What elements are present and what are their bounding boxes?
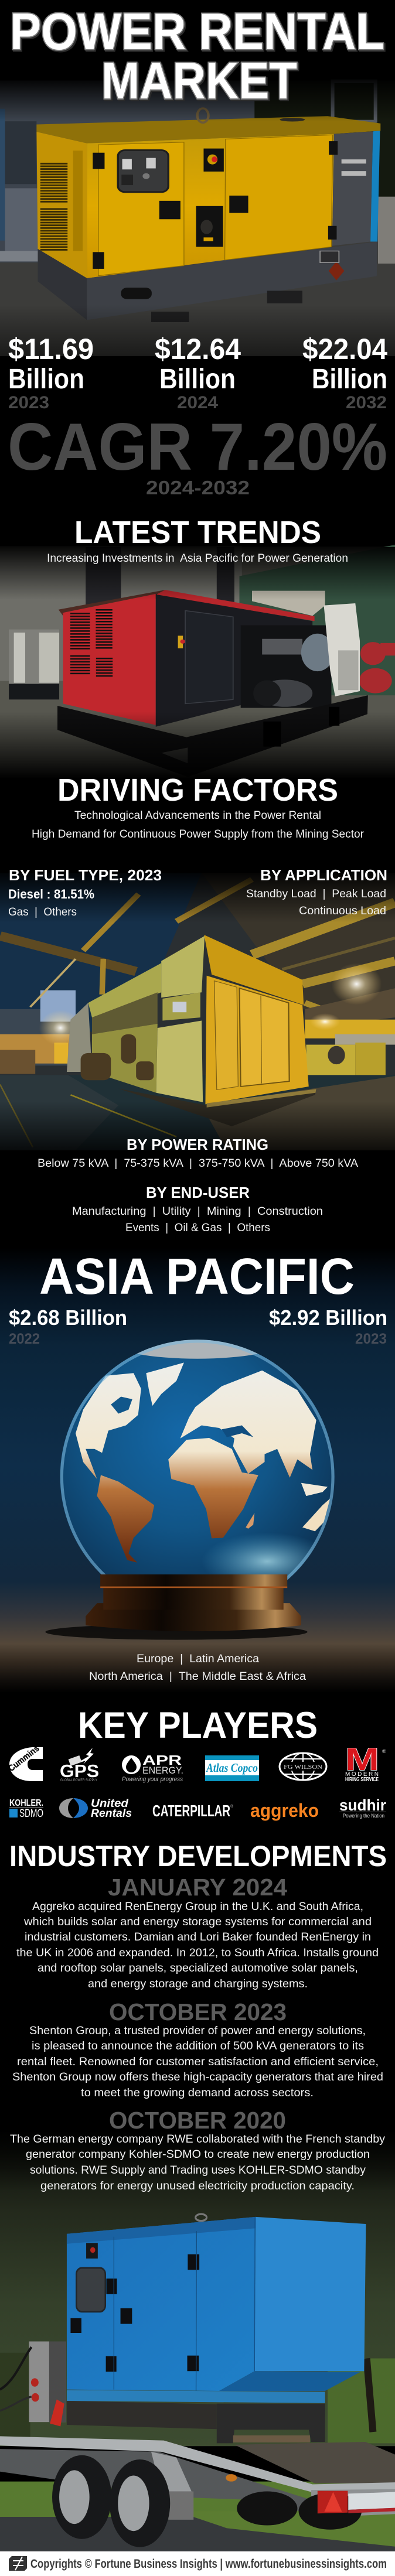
segment: by end-user: Manufacturing | Utility | Mining | Construction [72, 1205, 323, 1218]
panel: regional background [0, 1248, 395, 1693]
logo: United Rentals: United [91, 1798, 128, 1810]
market size stat: 2023: Billion [8, 364, 84, 395]
control panel [118, 150, 168, 192]
logo: FG Wilson [280, 1753, 326, 1780]
segment: by fuel type: BY FUEL TYPE, 2023 [9, 866, 162, 884]
text: October 2020 development: generators for energy unused electricity production capacity. [40, 2179, 355, 2192]
heading: latest trends: LATEST TRENDS [74, 515, 321, 550]
text: October 2023 development: Shenton Group now offers these high-capacity generators that are hired [12, 2071, 383, 2083]
segment: by power rating [38, 1136, 358, 1170]
text: January 2024 development: the UK in 2006 and expanded. In 2012, to South Africa. Installs ground [16, 1946, 379, 1959]
stat: asia pacific 2023 [269, 1306, 387, 1347]
generator body [36, 108, 380, 322]
logo: United Rentals [59, 1798, 132, 1820]
title [10, 2, 386, 111]
market size stat: 2024: Billion [159, 364, 236, 395]
text: October 2020 development: The German energy company RWE collaborated with the French standby [10, 2133, 385, 2145]
text: October 2023 development: Shenton Group, a trusted provider of power and energy solutions, [29, 2024, 366, 2037]
text: driving factors list: Technological Advancements in the Power Rental [74, 809, 321, 822]
text: January 2024 development: which builds solar and energy storage systems for commercial and [23, 1915, 372, 1928]
logo: GPS: GLOBAL POWER SUPPLY [60, 1779, 97, 1782]
stat: asia pacific 2023: $2.92 Billion [269, 1306, 387, 1330]
logo: Caterpillar: CATERPILLAR [152, 1802, 230, 1820]
text: January 2024 development: and energy storage and charging systems. [88, 1977, 308, 1990]
logo: GPS [60, 1748, 99, 1782]
market size stat: 2024 [155, 333, 241, 412]
text: October 2023 development: rental fleet. Renowned for customer satisfaction and efficient service, [17, 2055, 379, 2068]
logo: Caterpillar: ® [230, 1804, 234, 1809]
heading: key players: KEY PLAYERS [78, 1705, 318, 1746]
segment: by application: Standby Load | Peak Load [246, 887, 386, 900]
panel: hero generator photo [0, 81, 395, 356]
text: other regions: North America | The Middle East & Africa [89, 1670, 306, 1683]
logo: Modern Hiring Service: ® [382, 1748, 386, 1754]
segment: by application: Continuous Load [299, 904, 386, 917]
logo: Modern Hiring Service [345, 1742, 386, 1783]
text: October 2020 development: generator company Kohler-SDMO to create new energy production [26, 2148, 370, 2161]
stat: asia pacific 2022: $2.68 Billion [9, 1306, 127, 1330]
panel: footer [0, 2551, 395, 2576]
logo: GPS: GPS [60, 1761, 99, 1781]
segment: by power rating: Below 75 kVA | 75-375 kVA | 375-750 kVA | Above 750 kVA [38, 1157, 358, 1170]
icon: Fortune Business Insights logo [9, 2556, 27, 2571]
logo: Atlas Copco [205, 1755, 259, 1781]
text: October 2023 development [12, 2024, 383, 2099]
market size stat: 2023 [8, 333, 94, 412]
text: October 2023 development: to meet the growing demand across sectors. [81, 2086, 314, 2099]
segment: by application: BY APPLICATION [260, 866, 387, 884]
market size stat: 2023: 2023 [8, 393, 49, 412]
text: October 2020 development: solutions. RWE Supply and Trading uses KOHLER-SDMO standby [30, 2164, 366, 2177]
logo: United Rentals: Rentals [91, 1808, 132, 1820]
logo: Kohler SDMO: KOHLER. [9, 1798, 43, 1808]
logo: Cummins: Cummins [6, 1744, 41, 1774]
text: January 2024 development [16, 1900, 379, 1990]
blue generator [67, 2214, 366, 2443]
logo: Sudhir: Powering the Nation [343, 1813, 384, 1819]
trailer image top fade [0, 2132, 395, 2191]
segment: by end-user: BY END-USER [146, 1184, 250, 1201]
panel: latest trends generator photo [0, 545, 395, 779]
heading: asia pacific: ASIA PACIFIC [39, 1248, 355, 1305]
segment: by power rating: BY POWER RATING [127, 1136, 268, 1153]
CAGR: 2024-2032 [146, 477, 250, 498]
logo: Sudhir: sudhir [339, 1796, 386, 1814]
title: MARKET [103, 53, 298, 111]
logo: Atlas Copco: Atlas Copco [205, 1761, 258, 1775]
segment: by fuel type: Diesel : 81.51% [8, 887, 94, 901]
hero image fade [0, 80, 395, 121]
text: driving factors list [32, 809, 364, 841]
market size stat: 2023: $11.69 [8, 333, 94, 365]
logo: FG Wilson: FG WILSON [284, 1764, 322, 1771]
date: January 2024: JANUARY 2024 [108, 1874, 287, 1901]
trailer [0, 2436, 395, 2547]
logo: APR Energy [122, 1752, 183, 1783]
globe [60, 1340, 335, 1580]
segment: by fuel type [8, 866, 162, 918]
logo: APR Energy: ENERGY. [142, 1765, 183, 1776]
logo: APR Energy: APR [142, 1752, 182, 1768]
text: January 2024 development: industrial customers. Damian and Lori Baker founded RenEnergy in [25, 1931, 371, 1943]
text: latest trend item: Increasing Investments in Asia Pacific for Power Generation [47, 552, 348, 565]
logo: Modern Hiring Service: MODERN [345, 1771, 379, 1778]
yellow generator enclosure [67, 935, 316, 1126]
heading: driving factors: DRIVING FACTORS [57, 773, 338, 808]
text: October 2023 development: is pleased to announce the addition of 500 kVA generators to its [32, 2039, 364, 2052]
stat: asia pacific 2022 [9, 1306, 127, 1347]
market size stat: 2032: $22.04 [302, 333, 387, 365]
date: October 2020: OCTOBER 2020 [109, 2107, 286, 2134]
text: other regions: Europe | Latin America [137, 1652, 259, 1665]
stat: asia pacific 2022: 2022 [9, 1331, 40, 1347]
text: other regions [89, 1652, 306, 1683]
logo: Kohler SDMO: SDMO [19, 1808, 43, 1820]
market size stat: 2032 [302, 333, 387, 412]
panel: yellow generator factory photo [0, 873, 395, 1150]
factory image fades [0, 873, 395, 923]
text: January 2024 development: and rooftop solar panels, specialized automotive solar panels, [38, 1962, 358, 1974]
text: October 2020 development [10, 2133, 385, 2192]
logo: Modern Hiring Service: M [345, 1742, 379, 1777]
bronze stand [86, 1574, 301, 1631]
icon: glass globe on bronze stand [45, 1327, 335, 1640]
logo: APR Energy: Powering your progress [122, 1776, 183, 1783]
engine [241, 626, 334, 708]
logo: Aggreko: aggreko [250, 1800, 319, 1821]
market size stat: 2032: 2032 [346, 393, 387, 412]
text: January 2024 development: Aggreko acquired RenEnergy Group in the U.K. and South Africa, [32, 1900, 363, 1913]
market size stat: 2024: $12.64 [155, 333, 241, 365]
text: driving factors list: High Demand for Continuous Power Supply from the Mining Sector [32, 828, 364, 841]
latest trends image fades [0, 547, 395, 600]
stat: asia pacific 2023: 2023 [355, 1331, 387, 1347]
door handles, hinges and stop button [93, 141, 338, 299]
segment: by application [246, 866, 387, 917]
stand shadow [45, 1624, 308, 1640]
logo: Modern Hiring Service: HIRING SERVICE [345, 1776, 379, 1783]
red and black generator [57, 590, 368, 777]
segment: by end-user [72, 1184, 323, 1234]
panel: blue generator on trailer photo [0, 2132, 395, 2551]
segment: by fuel type: Gas | Others [8, 906, 77, 918]
title: MARKET [101, 52, 297, 110]
left corridor [0, 990, 76, 1074]
date: October 2023: OCTOBER 2023 [109, 1998, 287, 2025]
market size stat: 2024: 2024 [177, 393, 218, 412]
segment: by end-user: Events | Oil & Gas | Others [125, 1221, 270, 1234]
logo: Kohler SDMO [9, 1798, 43, 1820]
control box [0, 2342, 66, 2426]
